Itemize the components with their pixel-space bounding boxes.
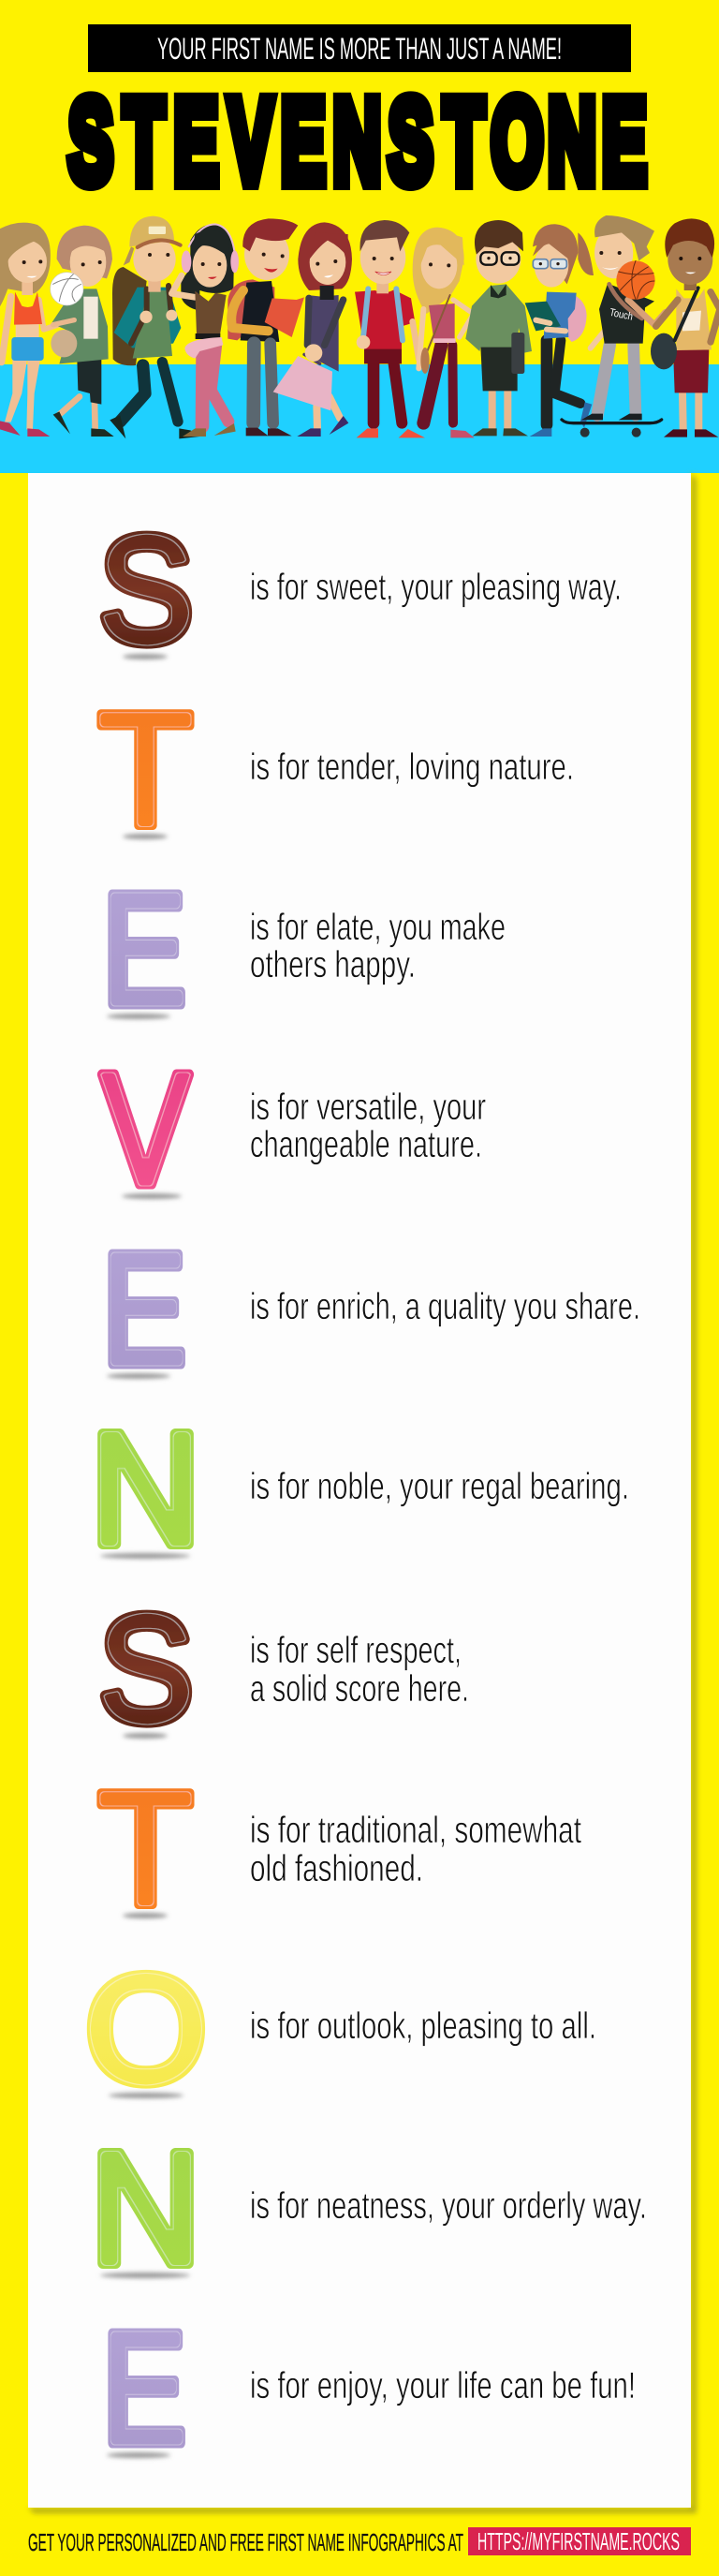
title: STEVENSTONE bbox=[68, 74, 647, 208]
person: girl with pink bag bbox=[273, 222, 352, 437]
row: O for outlook: is for outlook, pleasing to all. bbox=[250, 2006, 596, 2047]
row: T for tender: T bbox=[97, 679, 194, 861]
row: E for enrich: E bbox=[102, 1221, 186, 1398]
people illustration bbox=[0, 215, 719, 473]
person: girl with headphones bbox=[171, 224, 239, 437]
row: V for versatile: is for versatile, your bbox=[250, 1087, 486, 1128]
row: N for neatness bbox=[91, 2120, 647, 2298]
floor band bbox=[0, 364, 719, 473]
person: boy in yellow jersey bbox=[651, 218, 719, 437]
row: O for outlook: O bbox=[85, 1944, 207, 2113]
row: V for versatile: V bbox=[101, 1041, 190, 1219]
row: V for versatile: changeable nature. bbox=[250, 1124, 482, 1165]
row: E for elate bbox=[102, 861, 506, 1038]
person: skater with basketball: Touch bbox=[609, 307, 634, 323]
row: T for tender: is for tender, loving nature. bbox=[250, 747, 574, 788]
person: girl with volleyball bbox=[51, 226, 114, 437]
right group of people bbox=[355, 215, 719, 437]
row: S for sweet bbox=[99, 507, 622, 674]
row: N for noble bbox=[91, 1400, 629, 1578]
row: E for enrich bbox=[102, 1221, 640, 1398]
row: S for sweet: S bbox=[99, 507, 193, 674]
row: O for outlook bbox=[85, 1944, 596, 2113]
person: blonde girl bbox=[413, 228, 475, 437]
row: E for elate: E bbox=[102, 861, 186, 1038]
panel: name letters bbox=[28, 473, 697, 2513]
row: S for self respect: S bbox=[99, 1586, 193, 1754]
row: S for self respect bbox=[99, 1586, 469, 1754]
heading banner bbox=[88, 24, 631, 72]
row: E for elate: is for elate, you make bbox=[250, 907, 506, 948]
row: E for elate: others happy. bbox=[250, 944, 416, 985]
row: T for traditional: old fashioned. bbox=[250, 1848, 423, 1889]
row: V for versatile bbox=[101, 1041, 486, 1219]
person: girl with ponytail and tablet bbox=[525, 224, 594, 437]
person: girl in orange top bbox=[0, 223, 72, 437]
person: skater with basketball bbox=[562, 215, 666, 437]
row: N for neatness: N bbox=[91, 2120, 200, 2298]
left group of people bbox=[0, 216, 352, 438]
person: boy in red shirt bbox=[355, 220, 425, 437]
row: S for self respect: is for self respect, bbox=[250, 1630, 462, 1671]
person: boy in cap with backpack bbox=[110, 216, 199, 438]
person: boy with glasses bbox=[465, 220, 532, 436]
row: N for noble: N bbox=[91, 1400, 200, 1578]
row: E for enjoy bbox=[102, 2299, 636, 2477]
row: T for traditional bbox=[97, 1758, 581, 1940]
row: T for tender bbox=[97, 679, 574, 861]
row: T for traditional: T bbox=[97, 1758, 194, 1940]
person: boy with red book bbox=[227, 218, 304, 436]
row: E for enjoy: E bbox=[102, 2299, 186, 2477]
footer bbox=[28, 2527, 691, 2556]
row: S for self respect: a solid score here. bbox=[250, 1668, 469, 1710]
row: T for traditional: is for traditional, somewhat bbox=[250, 1810, 581, 1851]
